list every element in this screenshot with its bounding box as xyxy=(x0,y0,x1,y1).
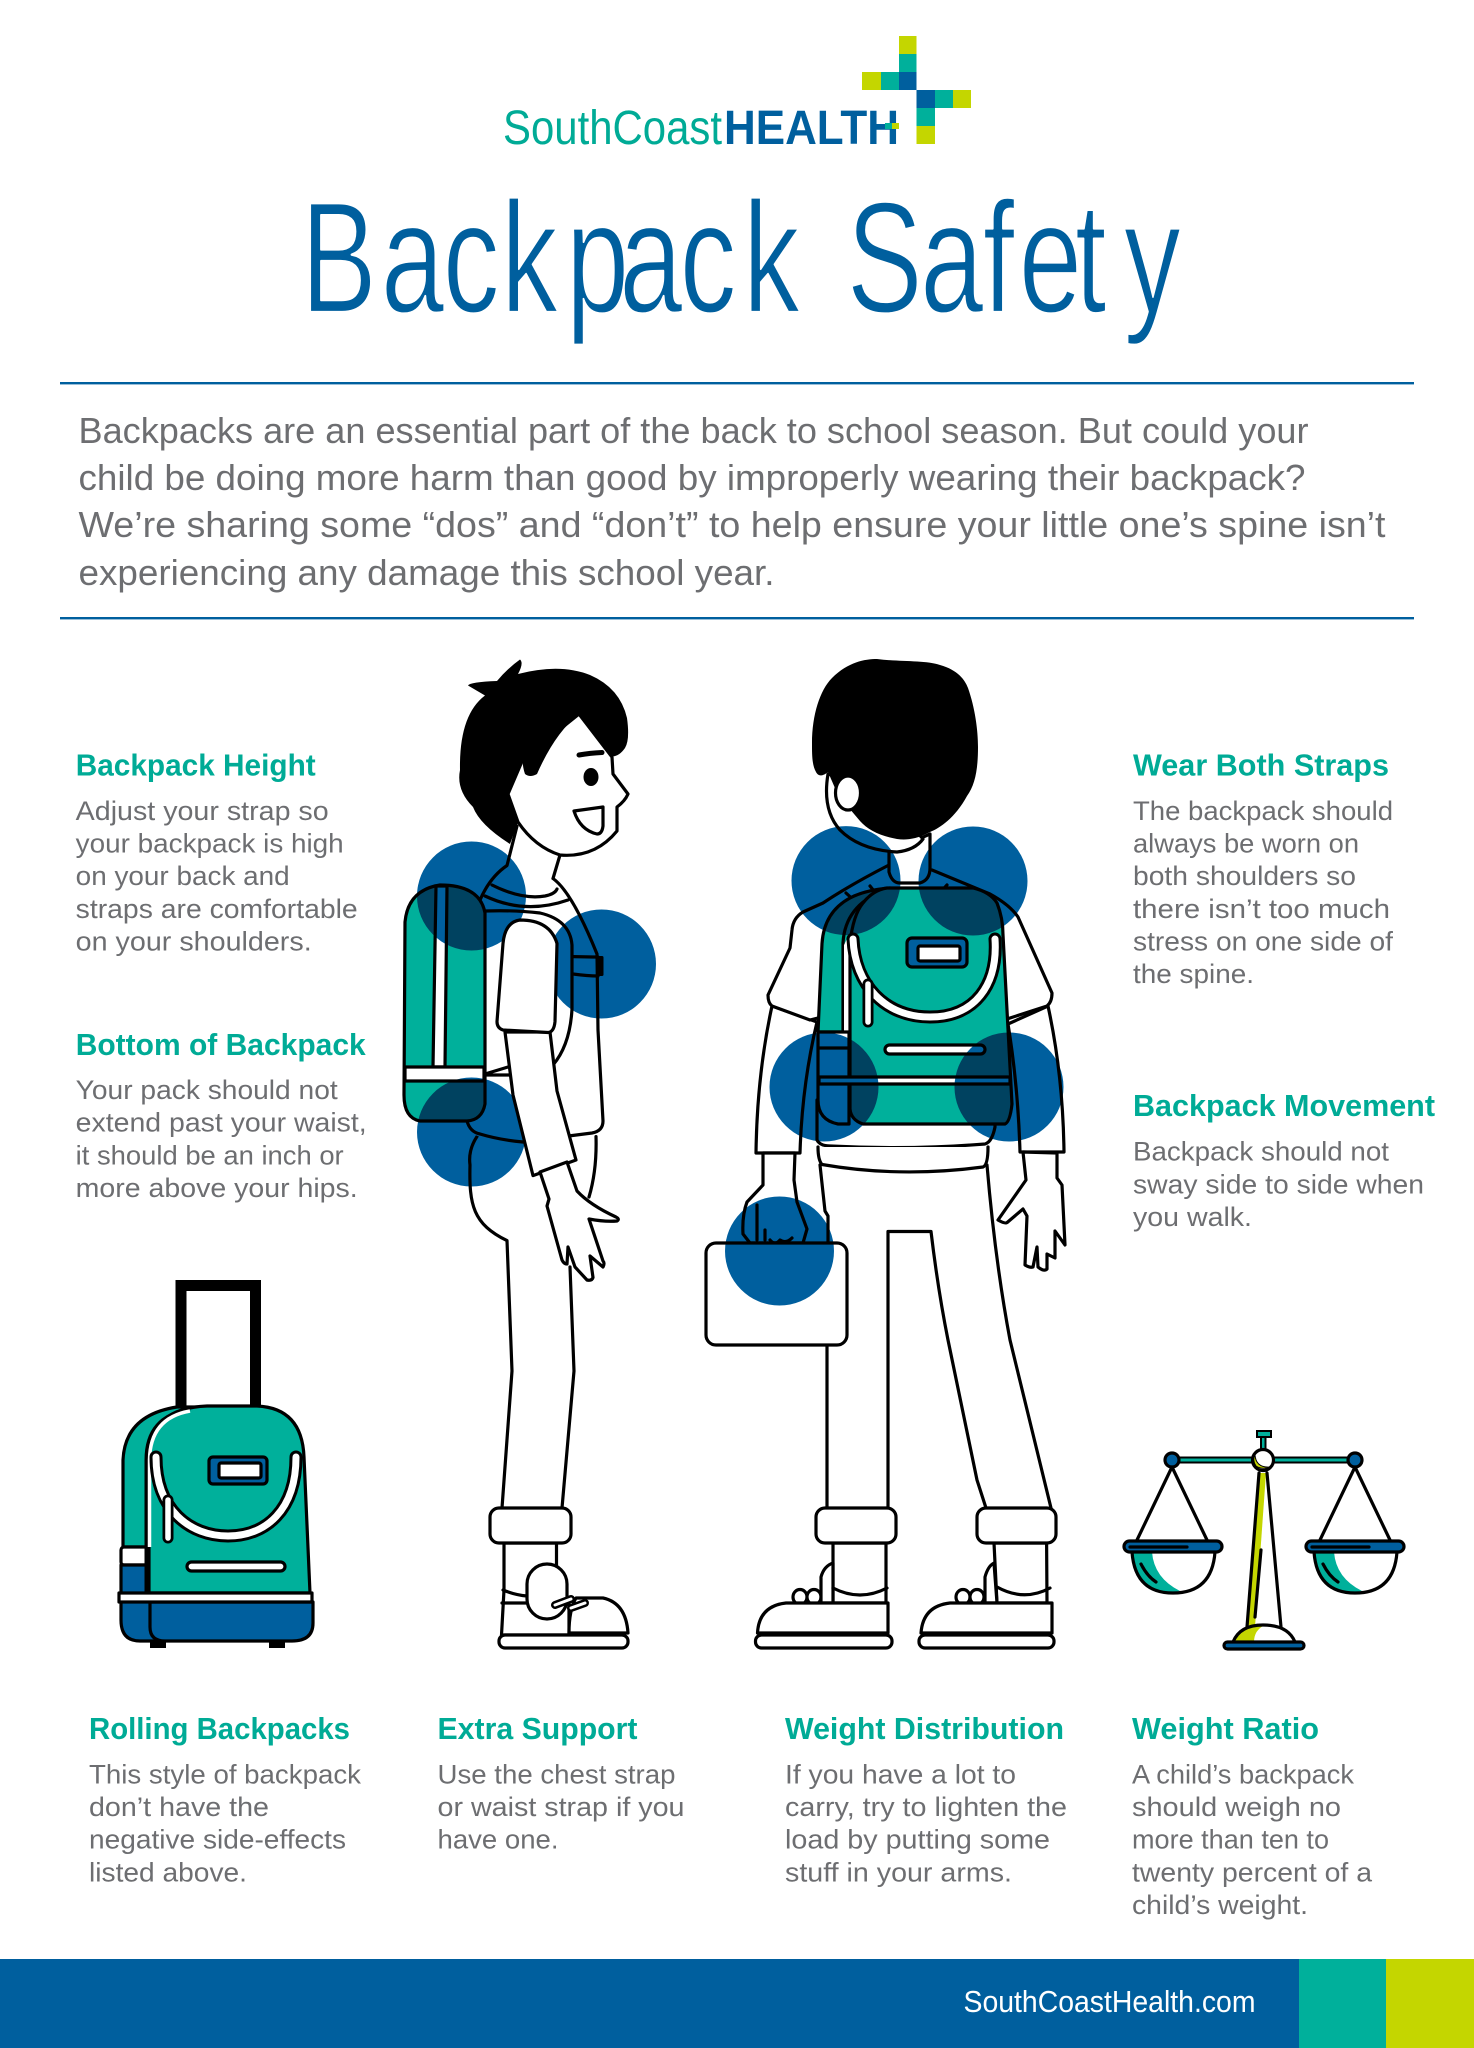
text: Extra Support: Extra Support xyxy=(438,1711,638,1746)
text: Backpack Height: Adjust your strap so xyxy=(76,796,329,826)
logo wordmark: HEALTH xyxy=(724,102,899,155)
logo wordmark xyxy=(503,102,899,155)
icon: back view student xyxy=(706,659,1065,1648)
text: Weight Ratio: A child’s backpack xyxy=(1132,1760,1354,1790)
text: Weight Distribution: Weight Distribution xyxy=(785,1711,1064,1746)
title: Backpack Safety xyxy=(301,170,1181,346)
torso xyxy=(467,826,603,1142)
icon: balance scale xyxy=(1124,1431,1404,1649)
text: Rolling Backpacks: negative side-effects xyxy=(89,1825,346,1855)
side bag xyxy=(404,885,485,1121)
text: Wear Both Straps: the spine. xyxy=(1133,959,1254,989)
right pan xyxy=(1306,1467,1404,1593)
sleeve and arm xyxy=(497,920,618,1280)
text: Weight Distribution: carry, try to lighten the xyxy=(785,1792,1067,1822)
text: Backpack Movement: Backpack should not xyxy=(1133,1137,1389,1167)
highlight circles on back view xyxy=(725,826,1064,1306)
left pan xyxy=(1124,1467,1222,1593)
shoe and cuff xyxy=(490,1508,628,1648)
legs xyxy=(470,1136,596,1508)
text: Extra Support: have one. xyxy=(438,1825,558,1855)
intro text block: We’re sharing some “dos” and “don’t” to help ensure your little one’s spine isn’t xyxy=(78,504,1386,545)
text: Extra Support xyxy=(438,1711,684,1855)
text: Extra Support: or waist strap if you xyxy=(438,1792,684,1822)
icon: rolling backpack xyxy=(119,1286,313,1648)
text: Backpack Height: Backpack Height xyxy=(76,748,316,782)
intro text block: child be doing more harm than good by improperly wearing their backpack? xyxy=(78,457,1306,498)
footer bar xyxy=(0,1959,1474,2048)
text: Weight Ratio: twenty percent of a xyxy=(1132,1857,1373,1887)
intro text block: experiencing any damage this school year. xyxy=(78,552,775,593)
text: Wear Both Straps: stress on one side of xyxy=(1133,926,1394,956)
hands and briefcase xyxy=(706,1152,1065,1345)
text: Wear Both Straps: The backpack should xyxy=(1133,796,1393,826)
text: Weight Ratio xyxy=(1132,1711,1373,1920)
text: Backpack Height: on your shoulders. xyxy=(76,926,312,956)
text: Rolling Backpacks: don’t have the xyxy=(89,1792,269,1822)
text: Weight Distribution xyxy=(785,1711,1067,1887)
text: Bottom of Backpack: Bottom of Backpack xyxy=(76,1027,366,1062)
intro text block: Backpacks are an essential part of the back to school season. But could your xyxy=(78,410,1308,451)
back bag xyxy=(818,888,1012,1124)
text: Bottom of Backpack: Your pack should not xyxy=(76,1075,338,1105)
neck and head xyxy=(889,834,930,883)
text: Weight Distribution: stuff in your arms. xyxy=(785,1857,1012,1887)
highlight circles on side view xyxy=(417,842,656,1186)
text: Rolling Backpacks: Rolling Backpacks xyxy=(89,1711,350,1746)
text: Bottom of Backpack: it should be an inch or xyxy=(76,1140,344,1170)
text: Weight Ratio: child’s weight. xyxy=(1132,1890,1308,1920)
text: Bottom of Backpack: more above your hips. xyxy=(76,1173,358,1203)
text: Backpack Height: on your back and xyxy=(76,861,290,891)
footer bar: SouthCoastHealth.com xyxy=(964,1984,1256,2019)
text: Wear Both Straps: both shoulders so xyxy=(1133,861,1356,891)
text: Wear Both Straps xyxy=(1133,748,1394,989)
text: Bottom of Backpack xyxy=(76,1027,367,1203)
text: Backpack Movement: Backpack Movement xyxy=(1133,1088,1435,1123)
text: Weight Ratio: should weigh no xyxy=(1132,1792,1341,1822)
text: Rolling Backpacks: listed above. xyxy=(89,1857,247,1887)
text: Bottom of Backpack: extend past your waist, xyxy=(76,1108,367,1138)
text: Backpack Height: your backpack is high xyxy=(76,829,344,859)
text: Wear Both Straps: always be worn on xyxy=(1133,829,1359,859)
text: Backpack Movement: you walk. xyxy=(1133,1202,1252,1232)
icon: side view student xyxy=(404,660,656,1648)
legs xyxy=(827,1165,1051,1508)
text: Backpack Height xyxy=(76,748,358,956)
text: Backpack Height: straps are comfortable xyxy=(76,894,358,924)
text: Backpack Movement xyxy=(1133,1088,1435,1232)
text: Wear Both Straps: there isn’t too much xyxy=(1133,894,1390,924)
shoes and cuffs xyxy=(756,1508,1056,1648)
intro text block xyxy=(60,382,1414,619)
text: Rolling Backpacks xyxy=(89,1711,361,1887)
text: Rolling Backpacks: This style of backpack xyxy=(89,1760,361,1790)
logo wordmark: SouthCoast xyxy=(503,102,722,155)
text: Weight Ratio: Weight Ratio xyxy=(1132,1711,1319,1746)
logo: SouthCoast Health xyxy=(503,36,971,155)
text: Weight Distribution: load by putting some xyxy=(785,1825,1050,1855)
logo cross xyxy=(862,36,971,144)
text: Weight Distribution: If you have a lot to xyxy=(785,1760,1016,1790)
text: Backpack Movement: sway side to side when xyxy=(1133,1169,1424,1199)
text: Extra Support: Use the chest strap xyxy=(438,1760,676,1790)
text: Wear Both Straps: Wear Both Straps xyxy=(1133,748,1389,782)
head xyxy=(459,660,628,855)
text: Weight Ratio: more than ten to xyxy=(1132,1825,1329,1855)
torso and arms xyxy=(768,865,1052,1145)
